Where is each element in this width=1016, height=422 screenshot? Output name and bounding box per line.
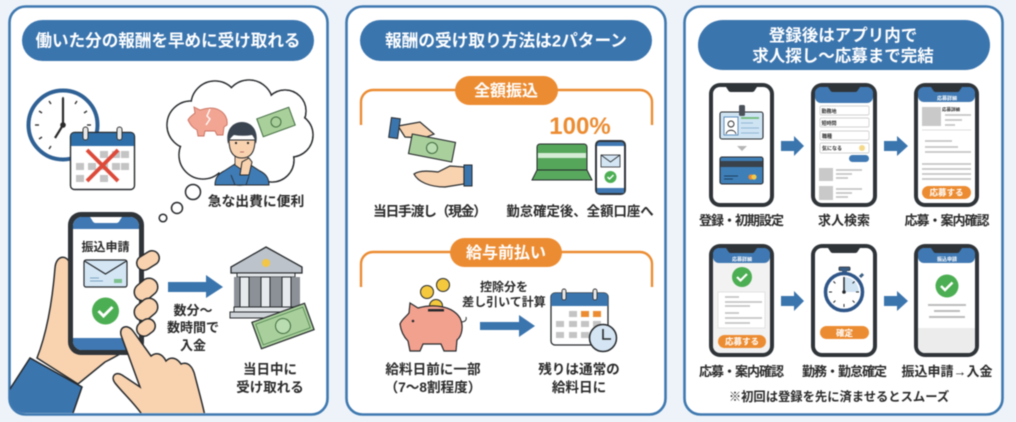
- label: part before payday: [385, 361, 481, 395]
- label: deducted calculation: [462, 279, 546, 309]
- icon: hand holding phone: [8, 212, 205, 416]
- banknote: [252, 303, 314, 349]
- arrow: advance to payday: [480, 315, 535, 337]
- phone: job search: 気になる: [822, 145, 842, 152]
- label: minutes to hours: 入金: [180, 338, 206, 353]
- icon: calendar crossed out: [70, 127, 134, 190]
- label: same-day cash: 当日手渡し（現金）: [373, 203, 487, 219]
- label: application: 応募・案内確認: [904, 213, 990, 228]
- label: minutes to hours: 数時間で: [167, 320, 219, 335]
- phone: apply: 応募詳細: [942, 106, 960, 113]
- label: receive same day: 当日中に: [243, 361, 297, 377]
- label: part before payday: 給料日前に一部: [385, 361, 481, 377]
- arrow: step 4 to 5: [781, 291, 804, 311]
- arrow: to bank: [168, 275, 223, 298]
- phone body: [68, 212, 144, 355]
- heading pill: two patterns: [360, 20, 652, 61]
- arrow: step 1 to 2: [781, 136, 804, 156]
- pointing hand: [113, 327, 205, 416]
- label: registration: 登録・初期設定: [699, 213, 784, 228]
- label: deducted calculation: 差し引いて計算: [462, 294, 546, 309]
- section: salary advance: 給与前払い: [466, 243, 546, 262]
- icon: ID card: [720, 105, 763, 139]
- label: 100%: 100%: [549, 113, 611, 140]
- label: receive same day: 受け取れる: [236, 379, 304, 395]
- phone: job search: [811, 83, 877, 207]
- phone: apply: 応募詳細: [937, 95, 957, 102]
- phone: job search: 短時間: [821, 120, 837, 127]
- icon: piggy bank with coins: [400, 278, 466, 351]
- phone: transfer request: 振込申請: [937, 256, 957, 263]
- phone body: 振込申請: [81, 239, 130, 254]
- icon: hand-to-hand cash: [389, 118, 472, 187]
- icon: green check: [92, 298, 119, 324]
- panel: early payment: [8, 6, 328, 416]
- phone: application confirmation: 応募詳細: [732, 256, 752, 263]
- phone: application confirmation: 応募する: [725, 336, 759, 346]
- fingers around phone: [143, 258, 152, 329]
- panel: two payment patterns: [346, 6, 666, 414]
- heading pill: app flow: 登録後はアプリ内で: [769, 25, 917, 45]
- icon: worried person: [215, 122, 269, 185]
- label: part before payday: （7〜8割程度）: [385, 379, 481, 395]
- icon: banknote in cloud: [257, 107, 295, 137]
- footnote: ※初回は登録を先に済ませるとスムーズ: [729, 389, 949, 404]
- label: deducted calculation: 控除分を: [480, 279, 528, 294]
- icon: envelope: [84, 260, 127, 287]
- phone: work and attendance: 確定: [836, 328, 853, 338]
- label: work and attendance: 勤務・勤怠確定: [802, 364, 887, 379]
- label: job search: 求人検索: [818, 213, 870, 228]
- arrow: step 5 to 6: [884, 291, 908, 311]
- heading pill: app flow: 求人探し〜応募まで完結: [752, 46, 934, 66]
- icon: calendar with clock: [551, 289, 616, 352]
- label: transfer and deposit: 振込申請→入金: [901, 364, 993, 379]
- label: full amount to account: 勤怠確定後、全額口座へ: [506, 203, 654, 219]
- label: minutes to hours: 数分〜: [173, 303, 213, 318]
- icon: broken piggy bank: [188, 107, 227, 136]
- icon: phone with confirmation: [595, 140, 626, 195]
- phone: apply: 応募する: [929, 188, 964, 198]
- thought bubble: worry about sudden expenses: [159, 80, 313, 222]
- icon: bankbook: [532, 144, 592, 180]
- label: rest on payday: 給料日に: [552, 379, 606, 395]
- phone: apply: [914, 83, 979, 207]
- label: rest on payday: [538, 361, 620, 395]
- heading pill: early payment: [22, 20, 314, 61]
- phone: work and attendance: [811, 244, 877, 357]
- phone: registration: [709, 83, 774, 207]
- icon: bank with cash: [230, 247, 314, 349]
- phone: application confirmation: [709, 244, 774, 357]
- icon: credit card: [720, 157, 763, 184]
- label: rest on payday: 残りは通常の: [538, 361, 620, 377]
- palm and thumb: [36, 256, 120, 385]
- sleeve: [8, 358, 82, 416]
- heading pill: app flow: [698, 20, 990, 70]
- phone: job search: 勤務地: [821, 108, 837, 115]
- section: full transfer: [361, 76, 652, 125]
- arrow: step 2 to 3: [884, 136, 908, 156]
- phone: transfer request: [914, 244, 979, 357]
- section: salary advance: [361, 238, 652, 287]
- section: full transfer: 全額振込: [474, 81, 538, 100]
- heading pill: early payment: 働いた分の報酬を早めに受け取れる: [36, 32, 300, 50]
- heading pill: two patterns: 報酬の受け取り方法は2パターン: [385, 30, 627, 50]
- label: sudden expenses: 急な出費に便利: [208, 193, 304, 209]
- label: minutes to hours: [167, 303, 219, 353]
- icon: clock: [28, 90, 98, 160]
- label: application confirmation: 応募・案内確認: [699, 364, 784, 379]
- label: receive same day: [236, 361, 304, 395]
- panel: app flow: [684, 6, 1002, 414]
- icon: stopwatch: [826, 267, 863, 310]
- phone: job search: 職種: [822, 133, 832, 140]
